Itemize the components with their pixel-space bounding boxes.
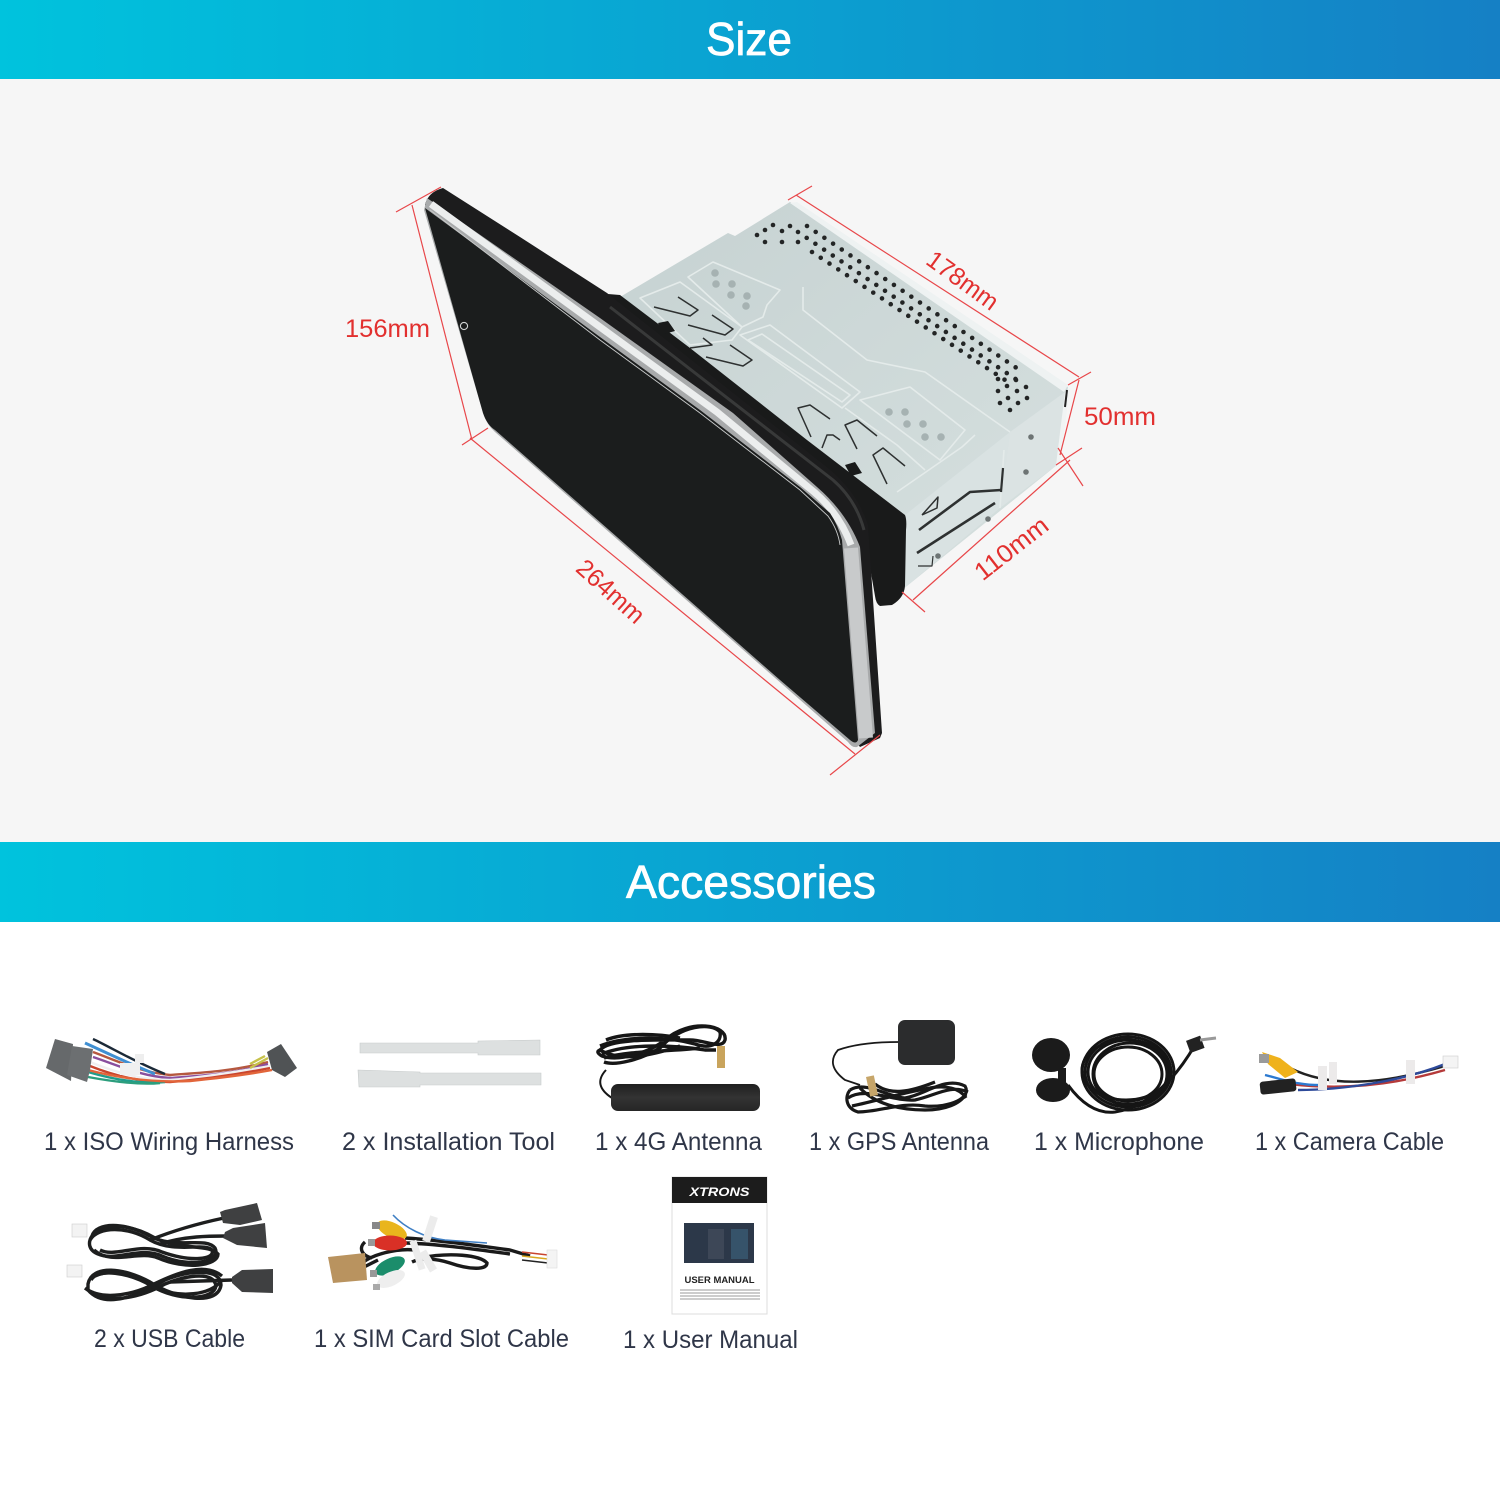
accessory labels: 1 x GPS Antenna [809, 1128, 989, 1156]
heading: Accessories: Accessories [626, 856, 876, 908]
embossed holes [711, 269, 945, 441]
accessory labels: 2 x Installation Tool [342, 1128, 555, 1156]
dimension lines [396, 186, 1091, 775]
black back edge [425, 188, 882, 747]
accessory labels: 2 x USB Cable [94, 1325, 245, 1353]
panel: size [0, 79, 1500, 842]
item: microphone [1032, 1034, 1216, 1112]
item: USB cables [67, 1203, 273, 1300]
rear dark panel [608, 294, 906, 606]
item: 4G antenna [598, 1026, 760, 1111]
accessory labels [44, 1128, 1444, 1354]
accessory labels: 1 x SIM Card Slot Cable [314, 1325, 569, 1353]
dimension labels [345, 245, 1156, 630]
accessory labels: 1 x 4G Antenna [595, 1128, 762, 1156]
silver rim [424, 198, 875, 747]
accessory labels: 1 x ISO Wiring Harness [44, 1128, 294, 1156]
accessory labels: 1 x User Manual [623, 1326, 798, 1354]
accessory labels: 1 x Camera Cable [1255, 1128, 1444, 1156]
item: GPS antenna [833, 1020, 968, 1112]
accessories header band [0, 842, 1500, 922]
chassis slots [654, 297, 1003, 566]
heading: Size: Size [706, 13, 792, 65]
perforation dots [798, 226, 1024, 380]
dimension labels: 178mm [921, 245, 1004, 316]
item: camera cable [1259, 1052, 1458, 1095]
accessory labels: 1 x Microphone [1034, 1128, 1204, 1156]
item: user manual [672, 1177, 767, 1314]
metal chassis [620, 202, 1070, 590]
size header band [0, 0, 1500, 79]
embossed lines [640, 262, 1010, 508]
display glass [425, 208, 858, 742]
dimension labels: 156mm [345, 315, 430, 343]
item: SIM card slot cable [328, 1215, 557, 1292]
item: user manual: USER MANUAL [684, 1275, 755, 1286]
dimension labels: 264mm [570, 554, 650, 630]
dimension labels: 110mm [969, 511, 1054, 586]
screen frame [424, 188, 882, 747]
screws [935, 434, 1034, 559]
item: user manual: XTRONS [688, 1185, 750, 1199]
panel: accessories [44, 1020, 1458, 1354]
dimension labels: 50mm [1084, 403, 1156, 431]
item: installation tool [358, 1040, 541, 1087]
product: head unit with dimensions [345, 186, 1156, 775]
item: ISO wiring harness [46, 1039, 297, 1084]
